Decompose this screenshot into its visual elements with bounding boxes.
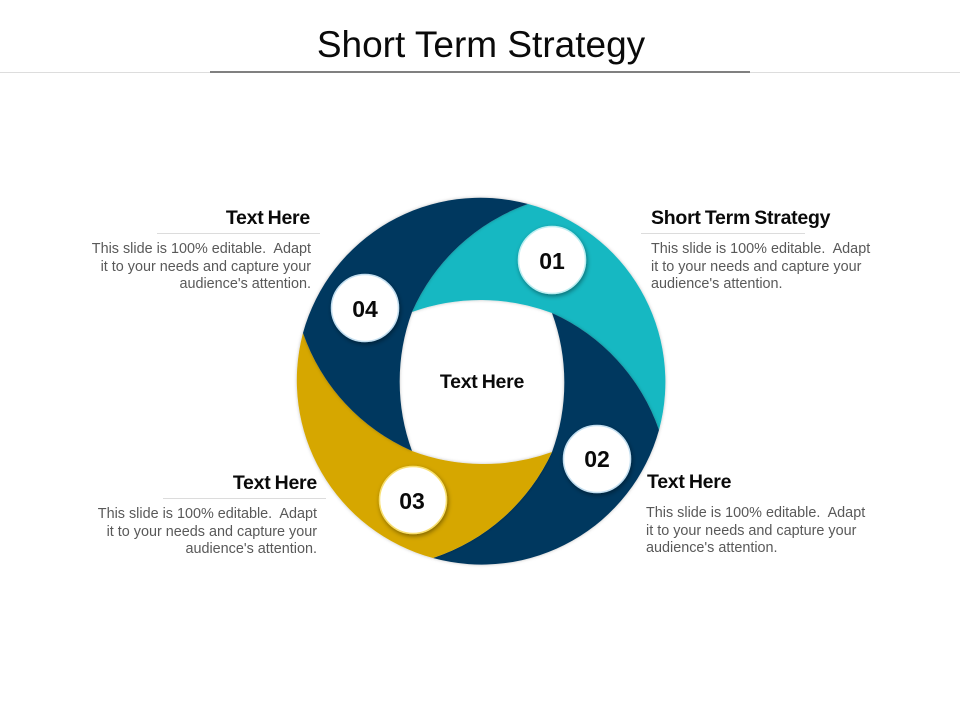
body (92, 241, 311, 292)
badge 03: 03 (399, 488, 425, 514)
block: bottom right (646, 471, 866, 556)
heading: Text Here (647, 471, 731, 493)
ring segment: 04 navy (303, 198, 528, 451)
badge 04 (332, 274, 398, 342)
badge 01: 01 (539, 248, 565, 274)
body: audience's attention. (179, 276, 311, 292)
body: audience's attention. (651, 276, 783, 292)
body: This slide is 100% editable. Adapt (98, 506, 317, 522)
header rule (0, 72, 960, 73)
rule (163, 498, 326, 499)
ring segment: 02 navy (433, 313, 659, 565)
block: top right (641, 207, 870, 292)
badge 03 (380, 466, 446, 534)
center label: Text Here (440, 371, 524, 393)
block: bottom left (98, 472, 326, 557)
ring segment: 03 gold (297, 333, 552, 558)
title: Short Term Strategy (317, 24, 645, 65)
rule (157, 233, 320, 234)
heading: Short Term Strategy (651, 207, 830, 229)
rule (641, 233, 805, 234)
body (651, 241, 870, 292)
ring segment: 01 teal (412, 204, 665, 430)
body (646, 505, 866, 556)
badge 02: 02 (584, 446, 610, 472)
body: audience's attention. (646, 540, 778, 556)
badge 01 (518, 226, 586, 294)
body: This slide is 100% editable. Adapt (646, 505, 865, 521)
body: it to your needs and capture your (101, 259, 311, 275)
body: it to your needs and capture your (107, 524, 317, 540)
body: it to your needs and capture your (651, 259, 861, 275)
body: it to your needs and capture your (646, 523, 856, 539)
heading: Text Here (233, 472, 317, 494)
body: This slide is 100% editable. Adapt (92, 241, 311, 257)
title underline (210, 71, 750, 73)
body: audience's attention. (185, 541, 317, 557)
badge 02 (564, 426, 630, 492)
heading: Text Here (226, 207, 310, 229)
block: top left (92, 207, 320, 292)
body (98, 506, 317, 557)
badge 04: 04 (352, 296, 378, 322)
body: This slide is 100% editable. Adapt (651, 241, 870, 257)
